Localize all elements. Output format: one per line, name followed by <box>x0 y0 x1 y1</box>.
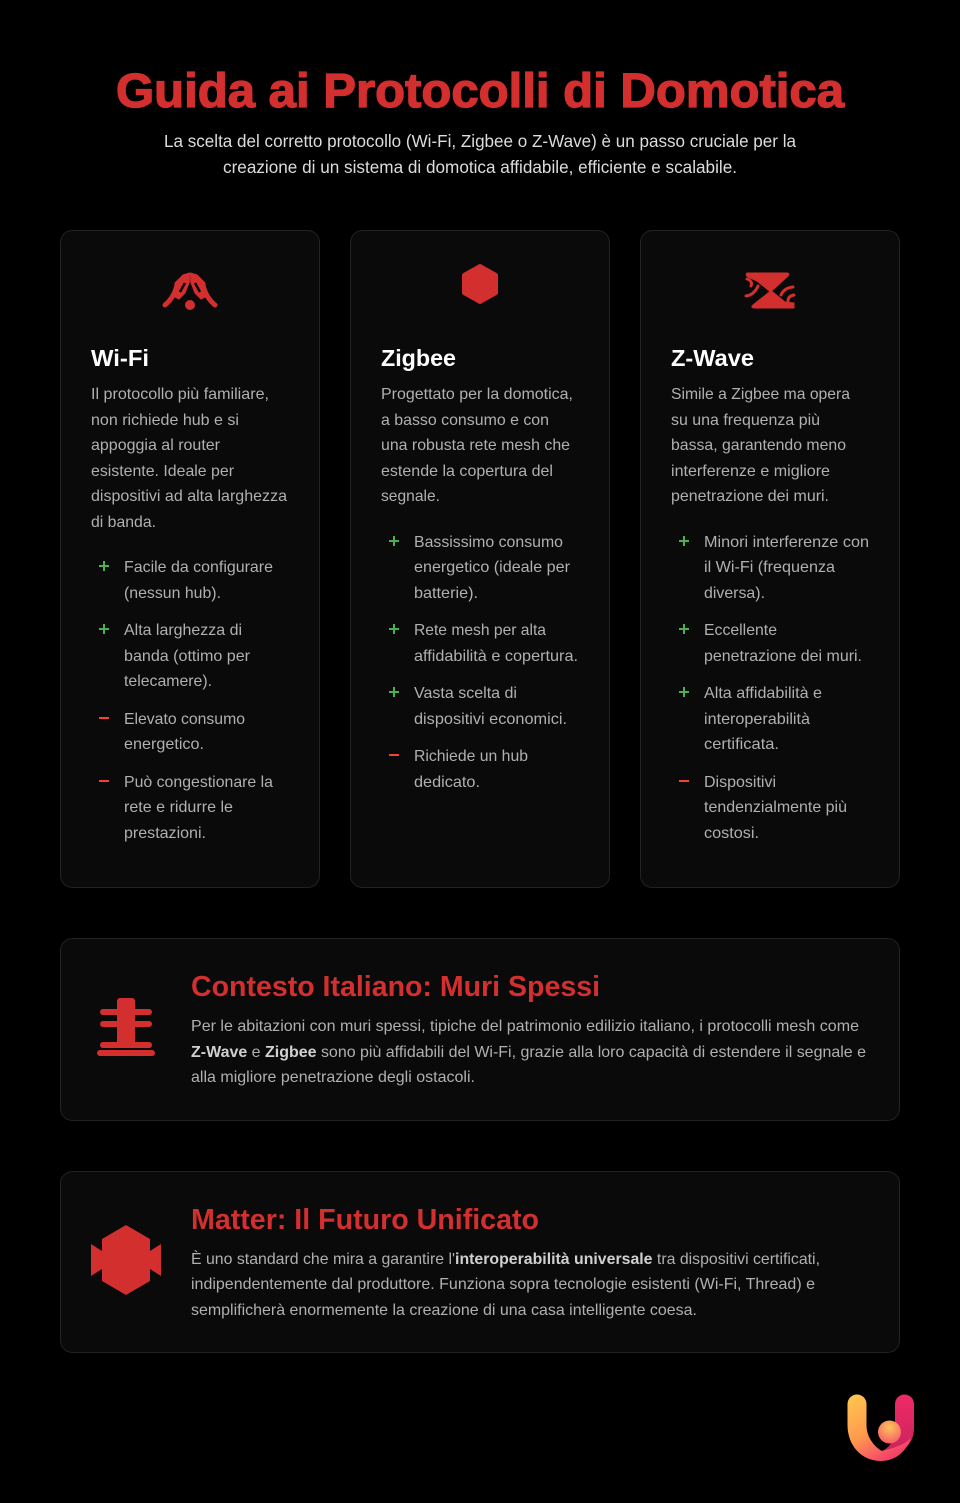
panel: Matter <box>60 1172 900 1352</box>
description: Wi-Fi: non richiede hub e si <box>91 412 239 429</box>
description: Wi-Fi: di banda. <box>91 514 156 531</box>
heading: Zigbee: Zigbee <box>381 345 456 371</box>
list: Wi-Fi pros and cons: Può congestionare la <box>124 774 273 791</box>
subtitle: La scelta del corretto protocollo (Wi-Fi, Zigbee o Z-Wave) è un passo cruciale per la <box>164 131 796 151</box>
description: Wi-Fi <box>91 386 287 531</box>
icon: Matter hexagon <box>91 1225 161 1295</box>
description: Wi-Fi: appoggia al router <box>91 437 220 454</box>
description: Z-Wave <box>671 386 850 505</box>
list: Zigbee pros and cons: Richiede un hub <box>414 748 528 765</box>
text: Matter: indipendentemente dal produttore. Funziona sopra tecnologie esistenti (Wi-Fi, Thread) e <box>191 1276 815 1293</box>
list: Wi-Fi pros and cons: Alta larghezza di <box>124 622 242 639</box>
icon: Wi-Fi <box>165 273 215 310</box>
description: Wi-Fi: esistente. Ideale per <box>91 463 234 480</box>
description: Wi-Fi: Il protocollo più familiare, <box>91 386 269 403</box>
description: Zigbee: segnale. <box>381 488 440 505</box>
list: Zigbee pros and cons: dedicato. <box>414 774 480 791</box>
description: Zigbee: estende la copertura del <box>381 463 553 480</box>
description: Z-Wave: interferenze e migliore <box>671 463 830 480</box>
text: Contesto Italiano <box>191 1018 866 1086</box>
icon: thick wall tower <box>97 998 155 1056</box>
list: Zigbee pros and cons: Vasta scelta di <box>414 685 517 702</box>
list: Z-Wave pros and cons: Minori interferenze con <box>704 534 869 551</box>
list: Z-Wave pros and cons: penetrazione dei muri. <box>704 648 862 665</box>
subtitle: creazione di un sistema di domotica affidabile, efficiente e scalabile. <box>223 157 737 177</box>
list: Z-Wave pros and cons: diversa). <box>704 585 765 602</box>
text: Contesto Italiano: Z-Wave e Zigbee sono più affidabili del Wi-Fi, grazie alla loro capacità di estendere il segnale e <box>191 1044 866 1061</box>
description: Zigbee: Progettato per la domotica, <box>381 386 573 403</box>
panel: Z-Wave <box>640 230 900 888</box>
heading: Contesto Italiano: Contesto Italiano: Muri Spessi <box>191 971 600 1003</box>
list: Z-Wave pros and cons: Alta affidabilità e <box>704 685 822 702</box>
description: Z-Wave: Simile a Zigbee ma opera <box>671 386 850 403</box>
title: Guida ai Protocolli di Domotica <box>116 65 844 118</box>
list: Z-Wave pros and cons: costosi. <box>704 825 759 842</box>
list: Zigbee pros and cons: affidabilità e copertura. <box>414 648 578 665</box>
list: Wi-Fi pros and cons: rete e ridurre le <box>124 799 233 816</box>
description: Zigbee: una robusta rete mesh che <box>381 437 570 454</box>
list: Z-Wave pros and cons: interoperabilità <box>704 711 810 728</box>
logo <box>848 1394 914 1461</box>
list: Z-Wave pros and cons: Dispositivi <box>704 774 776 791</box>
text: Matter: È uno standard che mira a garantire l' interoperabilità universale tra dispositivi certificati, <box>191 1249 820 1268</box>
list: Zigbee pros and cons: Rete mesh per alta <box>414 622 546 639</box>
description: Wi-Fi: dispositivi ad alta larghezza <box>91 488 287 505</box>
list: Zigbee pros and cons: batterie). <box>414 585 478 602</box>
heading: Wi-Fi: Wi-Fi <box>91 345 149 371</box>
list: Z-Wave pros and cons: il Wi-Fi (frequenza <box>704 559 835 576</box>
icon: Z-Wave <box>746 273 794 308</box>
list: Zigbee pros and cons: Bassissimo consumo <box>414 534 563 551</box>
text: Matter: semplificherà enormemente la creazione di una casa intelligente coesa. <box>191 1302 697 1319</box>
heading: Matter: Matter: Il Futuro Unificato <box>191 1204 539 1236</box>
list: Zigbee pros and cons: dispositivi economici. <box>414 711 567 728</box>
list: Wi-Fi pros and cons: banda (ottimo per <box>124 648 250 665</box>
panel: Zigbee <box>350 230 610 888</box>
heading: Z-Wave: Z-Wave <box>671 345 754 371</box>
description: Zigbee <box>381 386 573 505</box>
list: Zigbee pros and cons: energetico (ideale per <box>414 559 570 576</box>
subtitle <box>164 131 796 177</box>
list: Z-Wave pros and cons: certificata. <box>704 736 779 753</box>
list: Z-Wave pros and cons: Eccellente <box>704 622 777 639</box>
list: Wi-Fi pros and cons: energetico. <box>124 736 204 753</box>
description: Z-Wave: su una frequenza più <box>671 412 820 429</box>
list: Wi-Fi pros and cons: telecamere). <box>124 673 212 690</box>
text: Matter <box>191 1249 820 1319</box>
list: Wi-Fi pros and cons: Facile da configurare <box>124 559 273 576</box>
list: Wi-Fi pros and cons <box>99 559 273 842</box>
list: Zigbee pros and cons <box>389 534 578 791</box>
list: Wi-Fi pros and cons: Elevato consumo <box>124 711 245 728</box>
list: Wi-Fi pros and cons: (nessun hub). <box>124 585 221 602</box>
icon: Zigbee hexagon <box>464 266 496 302</box>
description: Z-Wave: penetrazione dei muri. <box>671 488 829 505</box>
list: Z-Wave pros and cons: tendenzialmente più <box>704 799 847 816</box>
text: Contesto Italiano: Per le abitazioni con muri spessi, tipiche del patrimonio edilizio italiano, i protocolli mesh come <box>191 1018 859 1035</box>
text: Contesto Italiano: alla migliore penetrazione degli ostacoli. <box>191 1069 475 1086</box>
list: Z-Wave pros and cons <box>679 534 869 842</box>
panel: Contesto Italiano <box>60 938 900 1120</box>
panel: Wi-Fi <box>60 230 320 888</box>
description: Zigbee: a basso consumo e con <box>381 412 549 429</box>
list: Wi-Fi pros and cons: prestazioni. <box>124 825 206 842</box>
description: Z-Wave: bassa, garantendo meno <box>671 437 846 454</box>
